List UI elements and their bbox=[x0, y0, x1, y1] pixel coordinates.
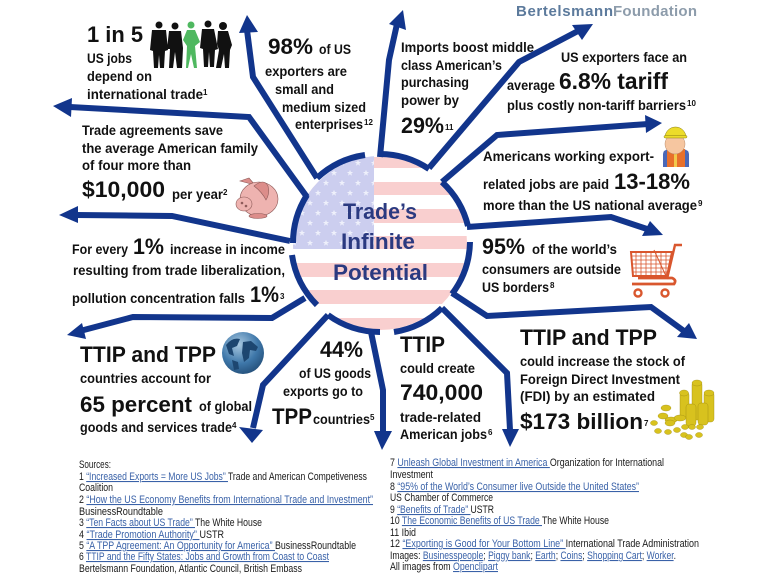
text: 98% of US exporters: enterprises bbox=[295, 116, 363, 132]
text: export-related jobs bbox=[483, 148, 703, 213]
text: for every 1%: 1% bbox=[250, 282, 279, 307]
text: 98% of US exporters: 98% bbox=[268, 34, 313, 59]
arrow: lower right bbox=[452, 293, 697, 339]
icon: coins bbox=[650, 380, 714, 440]
icon: shopping cart bbox=[631, 245, 682, 296]
text: TTIP and TPP FDI: could increase the stock of bbox=[520, 353, 685, 369]
text: TTIP and TPP 65 percent: countries account for bbox=[80, 370, 211, 386]
title: Infinite bbox=[341, 229, 415, 254]
text: TTIP and TPP 65 percent: 65 percent bbox=[80, 392, 193, 417]
text: TTIP 740,000 bbox=[400, 332, 493, 442]
text: export-related jobs: related jobs are paid bbox=[483, 176, 609, 192]
title bbox=[333, 199, 428, 285]
text: 44%: 44% bbox=[320, 337, 363, 362]
text: tariff bbox=[507, 49, 696, 113]
text: trade agreements save: per year bbox=[172, 186, 224, 202]
text: TTIP 740,000: TTIP bbox=[400, 332, 445, 357]
arrow: down centre bbox=[371, 332, 392, 450]
sources right column: 10 The Economic Benefits of US Trade The White House bbox=[390, 515, 609, 527]
sources left column: 3 “Ten Facts about US Trade” The White House bbox=[79, 517, 262, 529]
text: 1 in 5: 1 in 5 bbox=[87, 22, 143, 47]
sources left column: Bertelsmann Foundation, Atlantic Council, British Embass bbox=[79, 563, 302, 575]
arrow: right toward worker bbox=[442, 115, 662, 182]
text: TTIP and TPP FDI: $173 billion bbox=[520, 409, 643, 434]
text: 98% of US exporters: small and bbox=[275, 81, 334, 97]
text: 1 in 5: 1 bbox=[203, 88, 208, 97]
text: 98% of US exporters bbox=[265, 34, 373, 132]
sources right column: 11 Ibid bbox=[390, 527, 416, 539]
text: TTIP 740,000: could create bbox=[400, 360, 475, 376]
sources right column: 12 “Exporting is Good for Your Bottom Line” International Trade Administration bbox=[390, 538, 699, 550]
text: 44%: of US goods bbox=[299, 365, 371, 381]
icon: piggy bank bbox=[236, 178, 278, 218]
icon: globe bbox=[222, 332, 264, 374]
text: imports boost: Imports boost middle bbox=[401, 39, 534, 55]
text: tariff: plus costly non-tariff barriers bbox=[507, 97, 686, 113]
arrow: upper right bbox=[429, 24, 593, 168]
text: export-related jobs: 9 bbox=[698, 199, 703, 208]
text: TTIP and TPP FDI bbox=[520, 325, 685, 434]
text: export-related jobs: Americans working export- bbox=[483, 148, 654, 164]
text: for every 1%: For every bbox=[72, 241, 128, 257]
text: imports boost: 29% bbox=[401, 113, 444, 138]
logo: Bertelsmann Foundation: Bertelsmann bbox=[516, 3, 613, 20]
text: 44% bbox=[272, 337, 375, 429]
text: imports boost bbox=[401, 39, 534, 138]
text: trade agreements save bbox=[82, 122, 258, 202]
arrow: TTIP down right bbox=[442, 308, 519, 447]
text: 98% of US exporters: of US bbox=[319, 41, 351, 57]
text: trade agreements save: of four more than bbox=[82, 157, 191, 173]
sources right column bbox=[390, 457, 699, 573]
text: imports boost: 11 bbox=[445, 123, 454, 132]
text: 95% of consumers: US borders bbox=[482, 279, 549, 295]
sources left column: 5 “A TPP Agreement: An Opportunity for America” BusinessRoundtable bbox=[79, 540, 356, 552]
text: 1 in 5: international trade bbox=[87, 86, 203, 102]
sources right column: 8 “95% of the World’s Consumer live Outside the United States” bbox=[390, 481, 639, 493]
sources left column bbox=[79, 459, 373, 575]
text: tariff: average bbox=[507, 77, 555, 93]
arrow: to lower left bbox=[67, 298, 305, 339]
text: 44%: countries bbox=[313, 411, 370, 427]
text: TTIP and TPP 65 percent bbox=[80, 342, 252, 435]
text: 44%: 5 bbox=[370, 413, 375, 422]
sources left column: Coalition bbox=[79, 482, 113, 494]
sources left column: 2 “How the US Economy Benefits from International Trade and Investment” bbox=[79, 494, 373, 506]
text: 95% of consumers: 95% bbox=[482, 234, 525, 259]
circular ring segments bbox=[292, 154, 470, 332]
text: 95% of consumers: of the world’s bbox=[532, 241, 617, 257]
text: imports boost: purchasing bbox=[401, 74, 469, 90]
text: tariff: 6.8% tariff bbox=[559, 68, 668, 94]
arrow: to left above trade agreements bbox=[53, 98, 307, 197]
text: 98% of US exporters: medium sized bbox=[282, 99, 366, 115]
text: 44%: TPP bbox=[272, 404, 312, 429]
sources left column: BusinessRoundtable bbox=[79, 506, 163, 518]
text: TTIP and TPP FDI: TTIP and TPP bbox=[520, 325, 657, 350]
text: for every 1% bbox=[72, 234, 285, 307]
text: for every 1%: 3 bbox=[280, 292, 285, 301]
text: imports boost: class American’s bbox=[401, 57, 502, 73]
text: 1 in 5: depend on bbox=[87, 68, 152, 84]
arrow: up centre bbox=[380, 10, 406, 157]
sources right column: 9 “Benefits of Trade” USTR bbox=[390, 504, 494, 516]
arrow: right toward cart bbox=[467, 217, 663, 236]
text: tariff: US exporters face an bbox=[561, 49, 687, 65]
sources right column: US Chamber of Commerce bbox=[390, 492, 493, 504]
sources left column: 1 “Increased Exports = More US Jobs” Trade and American Competiveness bbox=[79, 471, 367, 483]
text: for every 1%: resulting from trade liberalization, bbox=[73, 262, 285, 278]
text: 95% of consumers: consumers are outside bbox=[482, 261, 621, 277]
text: for every 1%: pollution concentration falls bbox=[72, 290, 245, 306]
text: for every 1%: 1% bbox=[133, 234, 164, 259]
text: TTIP and TPP 65 percent: TTIP and TPP bbox=[80, 342, 216, 367]
text: 1 in 5: US jobs bbox=[87, 50, 132, 66]
text: for every 1%: increase in income bbox=[170, 241, 285, 257]
text: TTIP and TPP FDI: Foreign Direct Investment bbox=[520, 371, 680, 387]
text: 95% of consumers bbox=[482, 234, 621, 295]
icon: worker bbox=[663, 127, 689, 167]
flag circle bbox=[293, 156, 467, 330]
arrow: to 98% upward bbox=[239, 15, 317, 178]
logo: Bertelsmann Foundation: Foundation bbox=[613, 3, 697, 20]
text: imports boost: power by bbox=[401, 92, 459, 108]
text: 98% of US exporters: exporters are bbox=[265, 63, 347, 79]
text: TTIP 740,000: 6 bbox=[488, 428, 493, 437]
sources left column: 4 “Trade Promotion Authority” USTR bbox=[79, 529, 224, 541]
sources right column: Investment bbox=[390, 469, 433, 481]
text: tariff: 10 bbox=[687, 99, 696, 108]
text: TTIP 740,000: 740,000 bbox=[400, 380, 483, 405]
text: TTIP and TPP 65 percent: goods and services trade bbox=[80, 419, 232, 435]
text: trade agreements save: 2 bbox=[223, 188, 228, 197]
arrow: to left below trade agreements bbox=[59, 206, 290, 241]
text: TTIP and TPP FDI: 7 bbox=[644, 419, 649, 428]
text: TTIP 740,000: American jobs bbox=[400, 426, 487, 442]
text: TTIP and TPP 65 percent: of global bbox=[199, 398, 252, 414]
text: 1 in 5 bbox=[87, 22, 208, 102]
sources right column: 7 Unleash Global Investment in America Organization for International bbox=[390, 457, 664, 469]
text: export-related jobs: more than the US national average bbox=[483, 197, 697, 213]
text: 98% of US exporters: 12 bbox=[364, 118, 373, 127]
text: 44%: exports go to bbox=[283, 383, 363, 399]
text: trade agreements save: Trade agreements save bbox=[82, 122, 223, 138]
text: export-related jobs: 13-18% bbox=[614, 169, 690, 194]
sources left column: Sources: bbox=[79, 459, 111, 471]
sources left column: 6 TTIP and the Fifty States: Jobs and Growth from Coast to Coast bbox=[79, 551, 329, 563]
text: trade agreements save: $10,000 bbox=[82, 177, 165, 202]
sources right column: Images: Businesspeople; Piggy bank; Earth; Coins; Shopping Cart; Worker. bbox=[390, 550, 676, 562]
text: TTIP and TPP 65 percent: 4 bbox=[232, 421, 237, 430]
text: TTIP 740,000: trade-related bbox=[400, 409, 481, 425]
title: Trade’s bbox=[343, 199, 417, 224]
text: trade agreements save: the average American family bbox=[82, 140, 258, 156]
logo: Bertelsmann Foundation bbox=[516, 3, 697, 20]
arrow: 44% down left bbox=[239, 315, 328, 443]
title: Potential bbox=[333, 260, 428, 285]
text: TTIP and TPP FDI: (FDI) by an estimated bbox=[520, 388, 655, 404]
sources right column: All images from Openclipart bbox=[390, 561, 498, 573]
text: 95% of consumers: 8 bbox=[550, 281, 555, 290]
icon: businesspeople bbox=[150, 20, 232, 68]
